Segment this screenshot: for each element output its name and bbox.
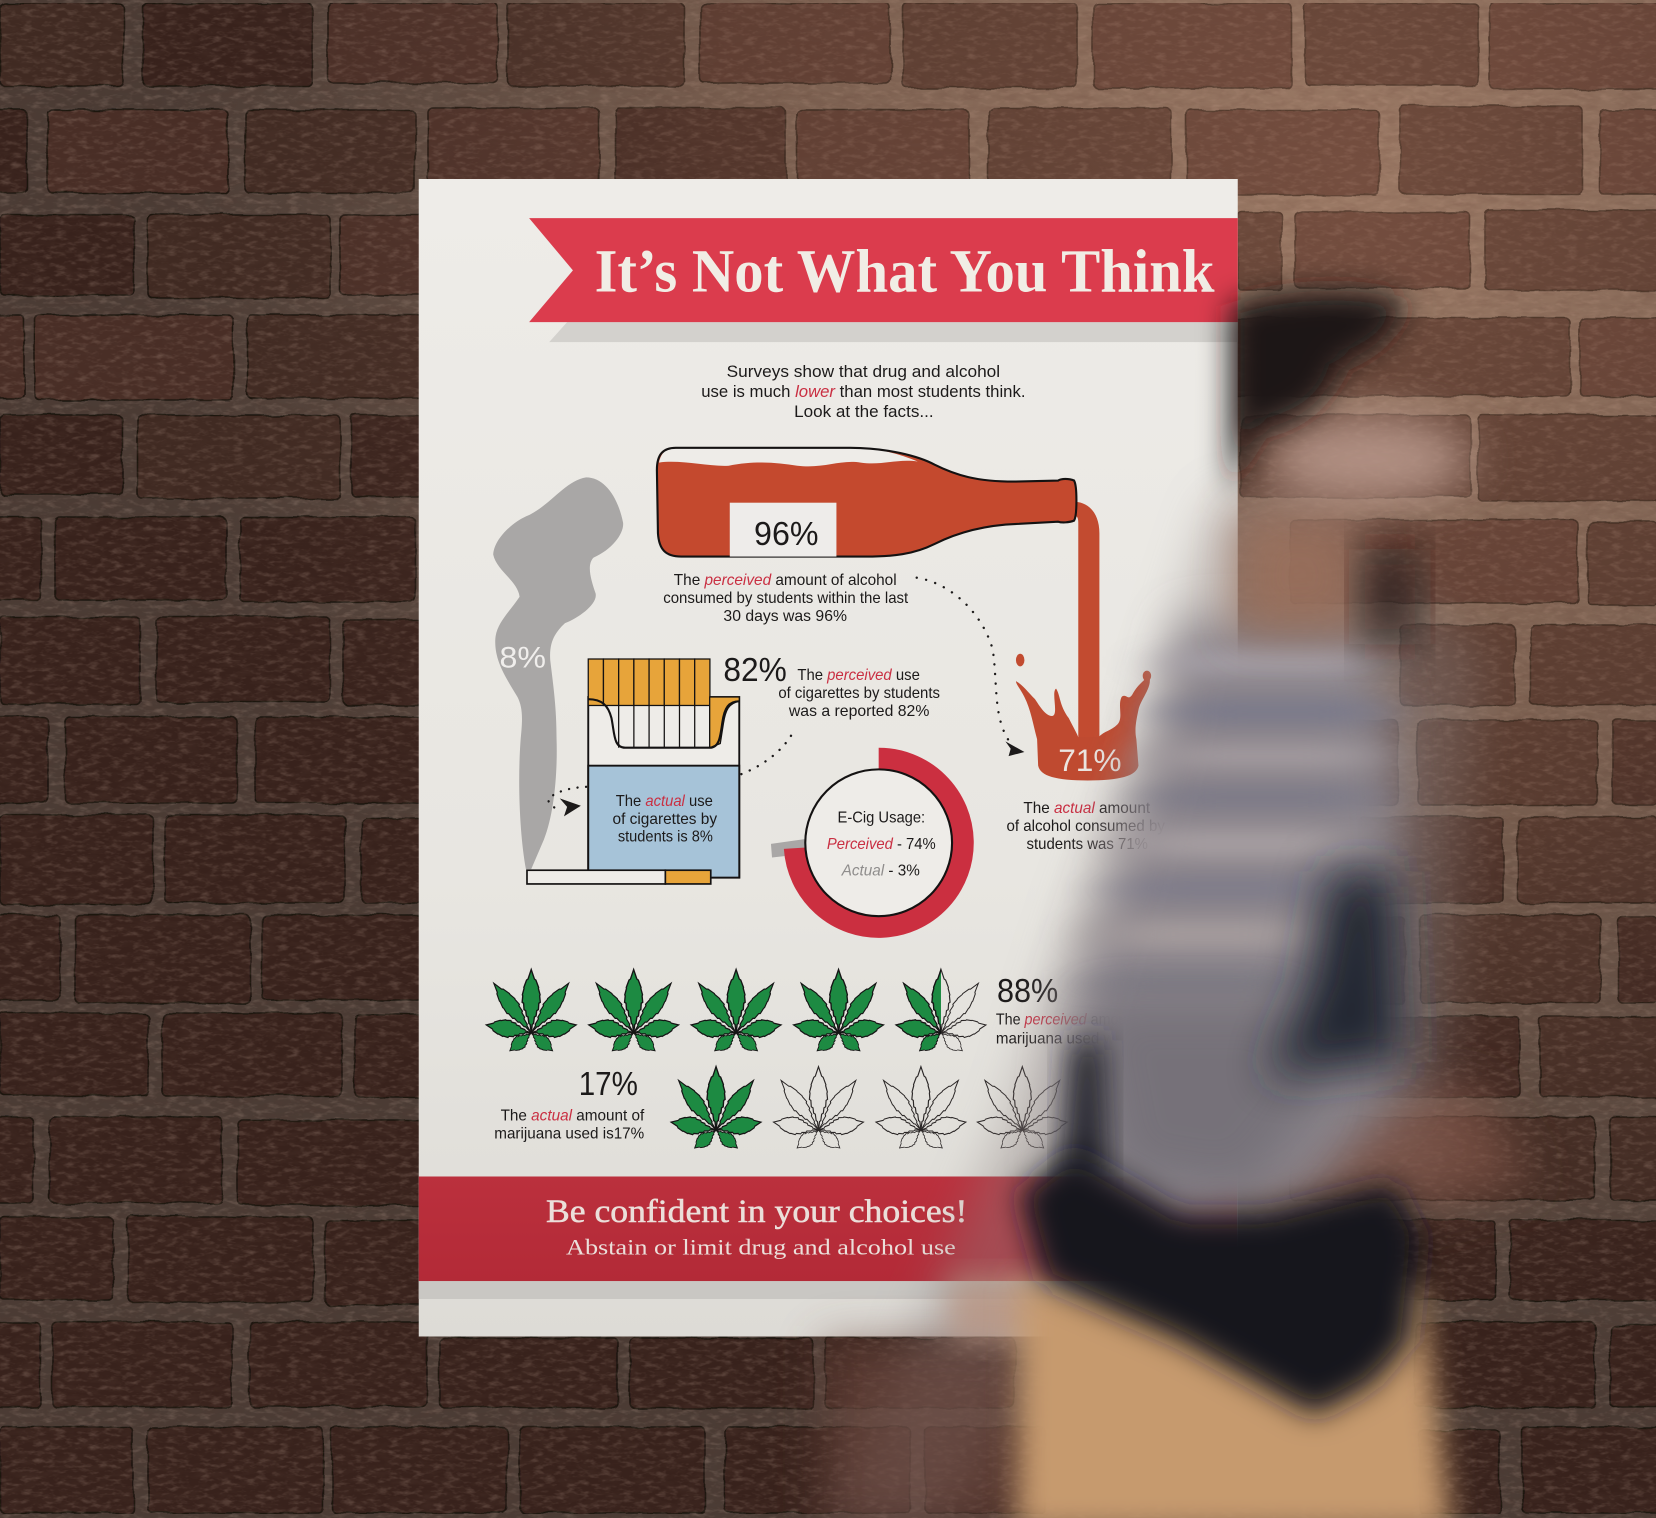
dotted arrow: pack to smoke: [548, 787, 586, 816]
perceived cigarette caption: The perceived use: [797, 667, 920, 684]
cigarette pack: [588, 659, 739, 878]
hair: [1230, 291, 1405, 496]
smoke with 8%: [493, 477, 623, 869]
cigarette pack: students is 8%: [618, 829, 713, 846]
lower shirt shading: [1088, 1003, 1320, 1193]
bottle illustration: 96%: [754, 515, 818, 553]
82% figure: 82%: [723, 651, 787, 689]
dark arm: [1267, 871, 1405, 1077]
actual alcohol caption: of alcohol consumed by: [1006, 818, 1165, 835]
blue panel: [588, 766, 739, 878]
dotted arrow: alcohol: [917, 578, 1024, 756]
face: [1264, 413, 1471, 506]
perceived cigarette caption: was a reported 82%: [788, 703, 930, 720]
actual marijuana caption: marijuana used is17%: [494, 1125, 645, 1142]
perceived marijuana caption: The perceived amount of: [996, 1011, 1155, 1028]
cigarette pack: of cigarettes by: [613, 811, 717, 828]
perceived marijuana caption: marijuana used was 88%: [996, 1030, 1165, 1047]
soft halo over poster: [834, 496, 1479, 1518]
actual marijuana caption: The actual amount of: [501, 1108, 645, 1125]
dark left sleeve: [1061, 1040, 1109, 1183]
intro text: use is much lower than most students think.: [701, 382, 1025, 401]
banner shadow: [549, 322, 1238, 342]
perceived alcohol caption: consumed by students within the last: [663, 590, 909, 607]
actual alcohol caption: students was 71%: [1027, 836, 1148, 853]
chart labels: E-Cig Usage:: [837, 810, 925, 827]
intro text: Look at the facts...: [794, 402, 934, 421]
perceived cigarette caption: [778, 667, 940, 720]
panel: poster: [419, 179, 1238, 1336]
trousers: [1016, 1283, 1452, 1518]
pack cut-out line: [588, 699, 739, 748]
lying cigarette: [527, 870, 711, 884]
actual alcohol caption: [1006, 800, 1165, 853]
poster-bottom pink fade: [950, 1278, 1046, 1341]
88% figure: 88%: [997, 972, 1058, 1010]
alcohol stream: [1073, 502, 1099, 745]
intro text: [701, 362, 1025, 421]
neck: [1236, 513, 1368, 634]
e-cig donut chart: [771, 759, 963, 927]
e-cig donut chart: Actual - 3%: [841, 863, 920, 880]
alcohol splash with 71%: 71%: [1058, 742, 1122, 778]
actual marijuana caption: [494, 1108, 645, 1142]
passer-by: blurred person: [824, 291, 1531, 1518]
footer subline: Abstain or limit drug and alcohol use: [566, 1235, 956, 1260]
perceived 74% ring: [795, 759, 963, 927]
actual marijuana leaves: [670, 1067, 1069, 1153]
dark hem: [1019, 1151, 1420, 1415]
actual 3% wedge: [771, 839, 809, 858]
17% figure: 17%: [579, 1065, 638, 1103]
pack body: [588, 697, 739, 878]
perceived alcohol caption: [663, 572, 909, 625]
centre circle: [805, 769, 952, 916]
shirt stripes: [1098, 650, 1383, 990]
title banner: [529, 218, 1238, 342]
alcohol splash with 71%: [1016, 654, 1151, 780]
footer banner: [419, 1176, 1237, 1299]
actual cigarette text: The actual use: [616, 793, 713, 810]
tall cigarettes: [588, 659, 710, 748]
bottle illustration: [657, 448, 1076, 557]
perceived alcohol caption: 30 days was 96%: [723, 608, 847, 625]
beard shadow: [1364, 549, 1415, 644]
perceived cigarette caption: of cigarettes by students: [778, 685, 940, 702]
perceived alcohol caption: The perceived amount of alcohol: [674, 572, 897, 589]
e-cig donut chart: Perceived - 74%: [827, 836, 936, 853]
poster sheet: [419, 179, 1238, 1336]
short cigarettes: [710, 697, 739, 748]
actual alcohol caption: The actual amount: [1023, 800, 1151, 817]
dotted line: pack to caption: [741, 734, 792, 774]
perceived marijuana caption: [996, 1011, 1165, 1047]
perceived marijuana leaves: [485, 969, 987, 1056]
footer headline: Be confident in your choices!: [546, 1194, 967, 1230]
lower right skin-brown smear: [1215, 1088, 1531, 1215]
smoke with 8%: 8%: [500, 641, 546, 674]
96% label: [730, 503, 836, 557]
red ribbon: [529, 218, 1238, 322]
title: It’s Not What You Think: [595, 237, 1215, 305]
lower left ghost: [824, 1341, 1024, 1518]
shirt: [1056, 623, 1405, 1236]
intro text: Surveys show that drug and alcohol: [727, 362, 1000, 381]
